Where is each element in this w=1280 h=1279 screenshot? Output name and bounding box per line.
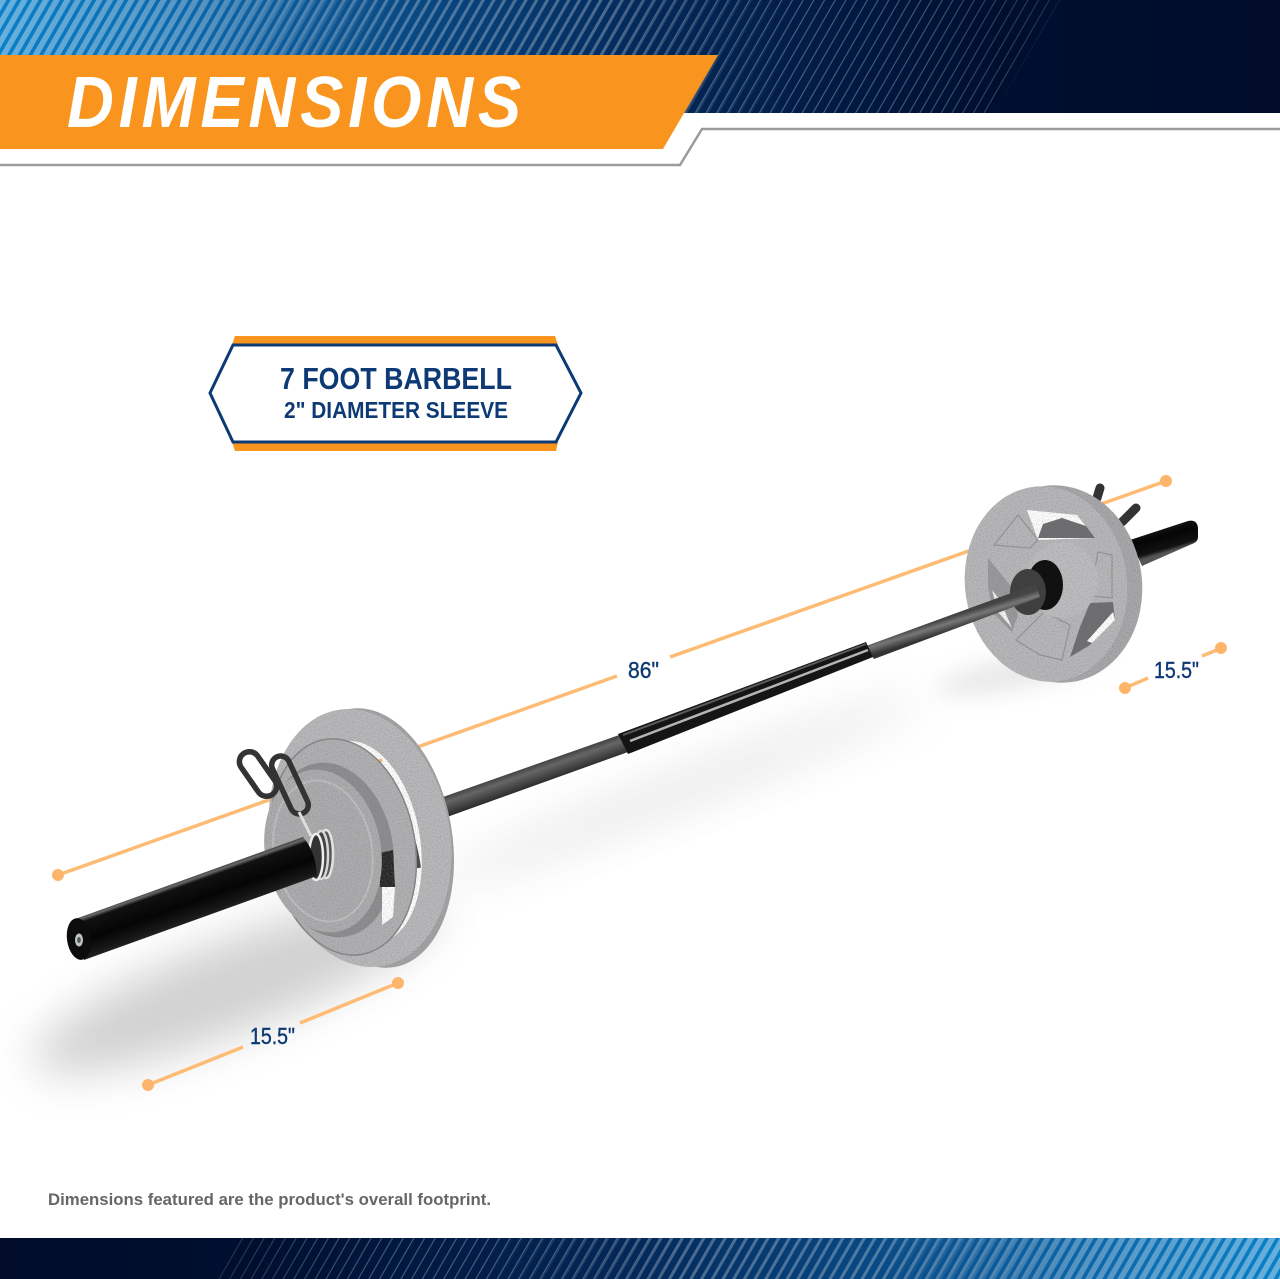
dimension line: right plate 15.5 inches: 15.5": [1154, 657, 1199, 683]
bar shaft and knurled sections: [443, 584, 1040, 817]
barbell: [64, 474, 1198, 982]
callout: barbell spec: 7 FOOT BARBELL: [280, 361, 512, 396]
left sleeve: [64, 837, 317, 961]
footer band: [0, 1238, 1280, 1279]
callout: barbell spec: 2" DIAMETER SLEEVE: [284, 397, 508, 423]
right sleeve: [1097, 488, 1198, 566]
title banner: DIMENSIONS: [67, 62, 526, 143]
dimension line: length 86 inches: 86": [628, 657, 659, 683]
right inner collar: [1010, 560, 1063, 615]
header band: [0, 0, 1280, 165]
dimension line: left plate 15.5 inches: 15.5": [250, 1023, 295, 1049]
footnote: Dimensions featured are the product's overall footprint.: [48, 1190, 491, 1209]
floor shadows: [18, 641, 1106, 1105]
dimension line: left plate 15.5 inches: [142, 977, 404, 1091]
right weight plate: [952, 474, 1155, 694]
dimension line: right plate 15.5 inches: [1119, 642, 1227, 694]
spring collar clip: [235, 748, 333, 880]
title banner: [0, 55, 718, 149]
callout: barbell spec: [210, 336, 581, 451]
left weight plates: [249, 694, 474, 982]
dimension line: length 86 inches: [52, 475, 1172, 881]
